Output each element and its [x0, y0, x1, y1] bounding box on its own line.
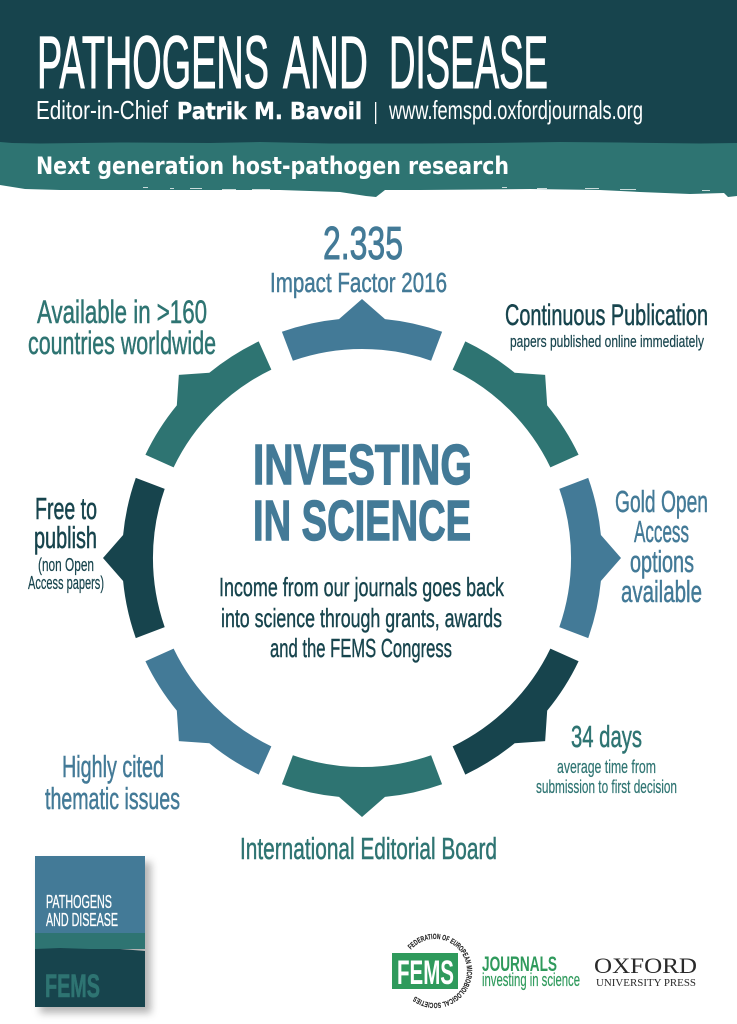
label: impact factor: [270, 217, 447, 298]
label: thematic issues: [45, 749, 180, 816]
centre description: into science through grants, awards: [221, 603, 502, 633]
label: 34 days: average time from: [557, 757, 656, 777]
label: available worldwide: countries worldwide: [28, 325, 216, 361]
journals investing in science: [482, 953, 580, 990]
header banner: [0, 0, 737, 197]
segment: 34 days: [445, 641, 602, 798]
Oxford University Press logo: OXFORD: [594, 953, 697, 978]
Oxford University Press logo: UNIVERSITY PRESS: [596, 978, 696, 989]
label: available worldwide: [28, 294, 216, 361]
editor line: [36, 95, 643, 125]
editor line: Editor-in-Chief: [36, 95, 169, 125]
segment: impact factor: [282, 299, 442, 361]
text: DISEASE: [389, 21, 548, 104]
centre heading: [253, 433, 472, 553]
centre heading: IN SCIENCE: [253, 489, 471, 553]
FEMS logo: FEMS: [397, 954, 454, 992]
label: free to publish: Free to: [35, 491, 97, 526]
title: AND: [283, 21, 368, 104]
Oxford University Press logo: [594, 953, 697, 989]
journal cover: FEMS: [45, 968, 100, 1004]
label: gold open access: Access: [634, 514, 689, 549]
centre description: and the FEMS Congress: [270, 633, 452, 663]
label: impact factor: Impact Factor 2016: [270, 267, 447, 298]
label: continuous publication: [505, 299, 708, 351]
ring of eight arrow segments: [103, 299, 621, 817]
segment: thematic issues: [122, 641, 279, 798]
label: impact factor: 2.335: [323, 217, 403, 269]
label: free to publish: [28, 491, 104, 593]
label: available worldwide: Available in >160: [37, 294, 207, 330]
label: 34 days: 34 days: [571, 719, 642, 754]
label: thematic issues: thematic issues: [45, 781, 180, 816]
tagline: Next generation host-pathogen research: [36, 152, 509, 180]
journal cover: AND DISEASE: [46, 910, 118, 930]
label: free to publish: publish: [34, 520, 97, 555]
FEMS logo: FEDERATION OF EUROPEAN MICROBIOLOGICAL SOCIETIES: [407, 934, 472, 1008]
label: thematic issues: Highly cited: [62, 749, 164, 784]
label: gold open access: [615, 484, 708, 609]
journals investing in science: JOURNALS: [482, 953, 557, 976]
segment: international editorial board: [282, 755, 442, 817]
editor line: Patrik M. Bavoil: [177, 99, 362, 125]
label: international editorial board: International Editorial Board: [240, 831, 497, 866]
centre heading: INVESTING: [253, 433, 472, 497]
label: free to publish: Access papers): [28, 573, 104, 593]
label: gold open access: options: [630, 544, 694, 579]
journal cover: [35, 856, 151, 1013]
label: free to publish: (non Open: [38, 555, 94, 575]
segment: available worldwide: [122, 318, 279, 475]
title: PATHOGENS: [37, 21, 269, 104]
journals investing in science: investing in science: [482, 970, 580, 990]
centre description: Income from our journals goes back: [219, 572, 505, 602]
label: 34 days: [536, 719, 677, 797]
centre description: [219, 572, 505, 663]
segment: continuous publication: [445, 318, 602, 475]
segment: free to publish: [103, 478, 165, 638]
journal cover: PATHOGENS: [46, 892, 112, 912]
segment: gold open access: [559, 478, 621, 638]
tagline brush band: [0, 142, 737, 197]
